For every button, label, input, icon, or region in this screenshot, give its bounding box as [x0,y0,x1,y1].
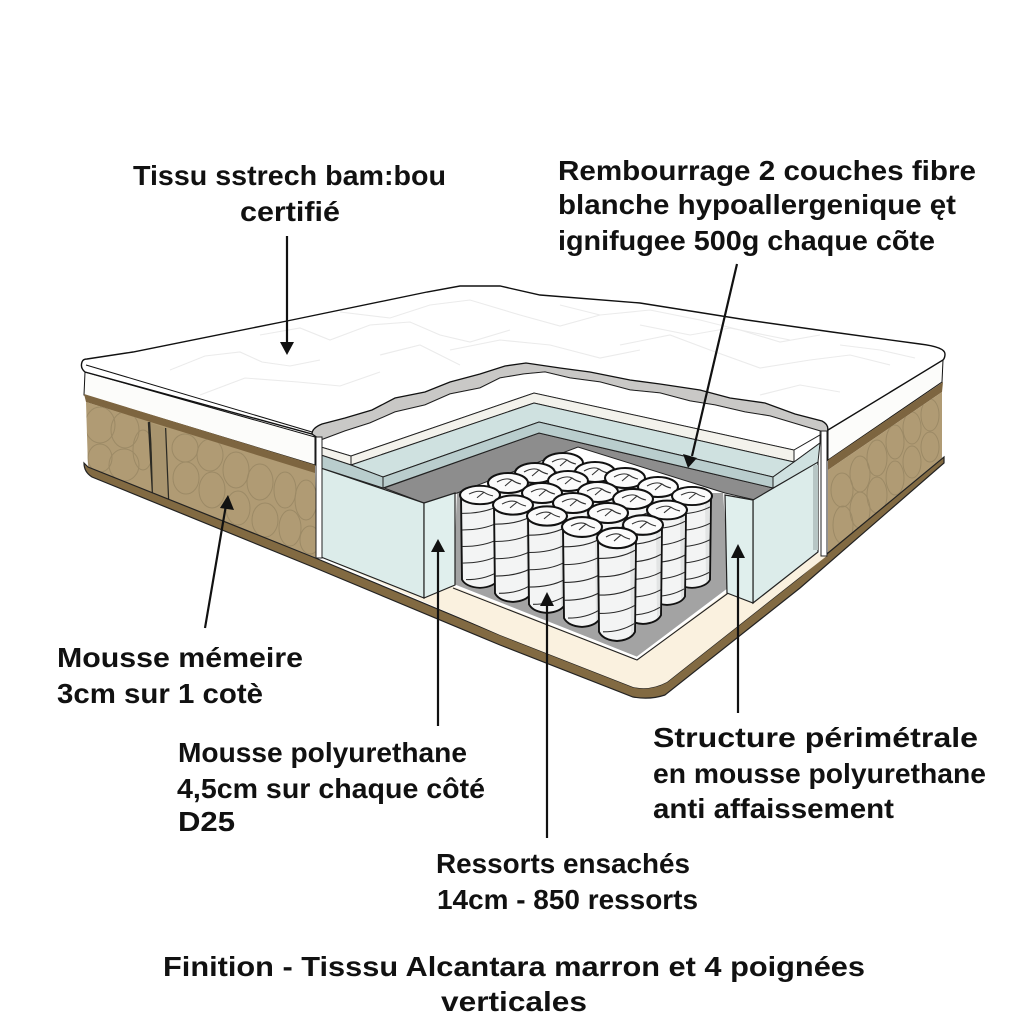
label: structure perimetrale: en mousse polyurethane [653,758,986,789]
label: ressorts ensaches [436,848,698,915]
caption: finition [163,951,865,1017]
right foam block [725,462,818,603]
left side fabric panel [84,372,320,558]
label: rembourrage: blanche hypoallergenique ęt [558,189,956,220]
spring bay base [453,493,730,658]
white padding layer [321,372,820,465]
cream base [321,553,828,688]
arrow: rembourrage [683,264,737,468]
arrow: ressorts [540,592,554,838]
caption: finition: verticales [441,986,587,1017]
pocket springs [460,453,712,641]
arrow: mousse memoire [205,495,234,628]
arrow: tissu [280,236,294,355]
arrow: mousse polyurethane [431,539,445,726]
white corner posts [316,431,827,558]
label: tissu stretch bambou: Tissu sstrech bam:bou [133,160,446,191]
label: rembourrage: ignifugee 500g chaque cõte [558,225,935,256]
brown bottom edge [84,457,944,698]
caption: finition: Finition - Tisssu Alcantara marron et 4 poignées [163,951,865,982]
label: ressorts ensaches: 14cm - 850 ressorts [437,884,698,915]
label: rembourrage: Rembourrage 2 couches fibre [558,155,976,186]
back gray wall [384,433,773,503]
label: mousse memoire [57,642,303,709]
label: tissu stretch bambou [133,160,446,227]
label: tissu stretch bambou: certifié [240,196,340,227]
top surface quilted fabric [81,286,945,434]
label: mousse memoire: Mousse mémeire [57,642,303,673]
label: rembourrage [558,155,976,256]
spring base white edge [453,585,730,658]
label: structure perimetrale: anti affaissement [653,793,894,824]
left foam block [321,468,455,598]
cut edge gray rim [312,363,828,440]
label: structure perimetrale [653,722,986,824]
label: mousse polyurethane: D25 [178,806,235,837]
mattress illustration [81,286,945,698]
label: mousse polyurethane: Mousse polyurethane [178,737,467,768]
label: mousse memoire: 3cm sur 1 cotè [57,678,263,709]
teal foam layer [321,403,820,488]
label: structure perimetrale: Structure périmétrale [653,722,978,753]
arrow: structure [731,544,745,713]
right side fabric panel [828,360,943,553]
label: mousse polyurethane: 4,5cm sur chaque côté [177,773,485,804]
label: mousse polyurethane [177,737,485,837]
label: ressorts ensaches: Ressorts ensachés [436,848,690,879]
